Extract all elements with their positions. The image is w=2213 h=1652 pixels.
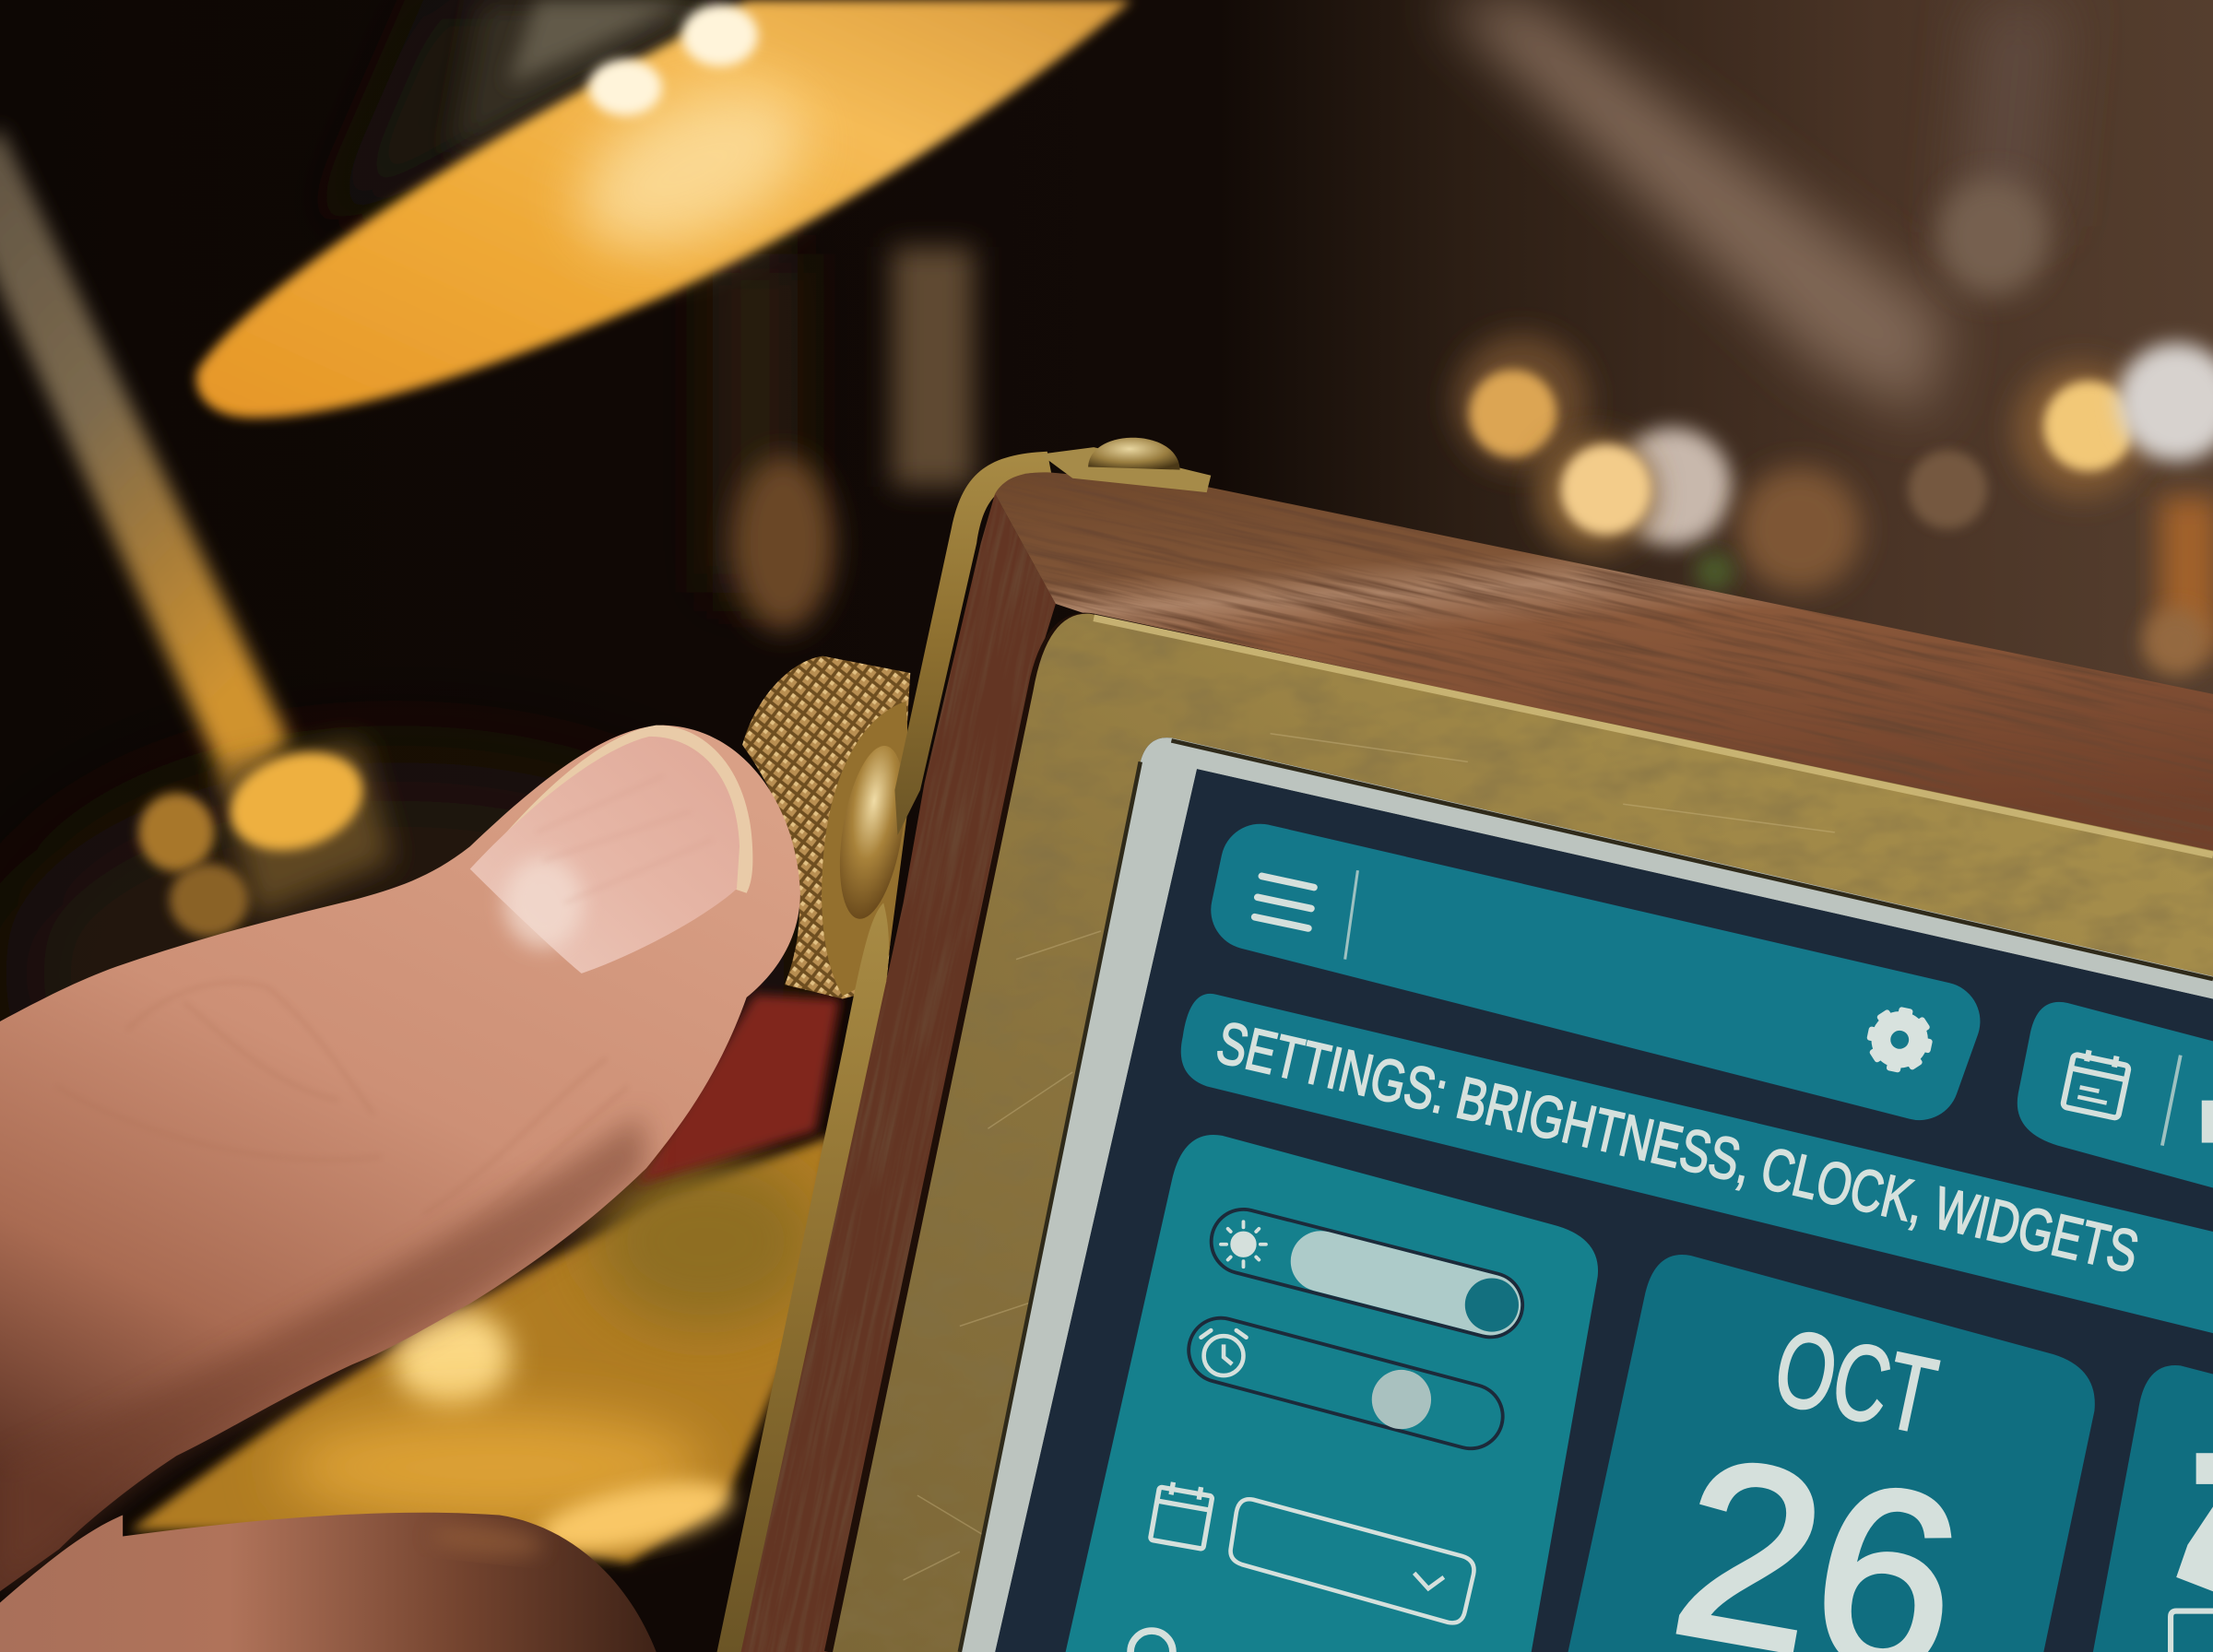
icon: hamburger menu: [1255, 876, 1314, 928]
left controls card: [1066, 1135, 1598, 1652]
icon: alarm clock: [1201, 1330, 1247, 1375]
dark shade underside: [325, 0, 748, 226]
date card: OCT: [1765, 1306, 1946, 1457]
icon: sun: [1221, 1221, 1266, 1267]
knuckle wrinkles: [56, 982, 628, 1242]
e-paper white margin: [960, 738, 2213, 1652]
date card: [1568, 1255, 2095, 1652]
e-paper dark screen: [995, 769, 2213, 1652]
lamp shade with glow: [196, 0, 1132, 418]
timer slider: [1201, 1330, 1471, 1429]
lower brass lamp base glow: [130, 1136, 833, 1564]
knurled brass knob: [742, 656, 916, 998]
fingernail: [470, 726, 752, 974]
walnut frame top face: [995, 472, 2213, 851]
brightness slider: [1221, 1221, 1519, 1332]
thin brass side bracket: [717, 452, 1051, 1652]
dark gap between wood and brass: [828, 617, 2213, 1652]
top menu bar: [1250, 864, 1941, 1080]
brass inner bezel: [819, 607, 2213, 1652]
right widgets card: [2093, 1365, 2213, 1652]
icon: settings gear: [1866, 1007, 1933, 1073]
icon: partial circle at bottom: [1130, 1631, 1173, 1652]
walnut frame left face: [741, 494, 1056, 1652]
thumb at bottom: [0, 1513, 657, 1652]
dropdown field: [1231, 1499, 1473, 1622]
background: blurred diagonal beams at right: [1439, 0, 2067, 416]
brass top plate and dome screw: [1040, 438, 1211, 492]
icon: calendar small: [2063, 1047, 2131, 1118]
icon: calendar: [1150, 1480, 1213, 1549]
bokeh lights: [1454, 335, 2213, 676]
calendar tab: [2018, 1002, 2213, 1188]
shadowed red skin behind finger tip: [635, 995, 840, 1185]
main finger: [0, 726, 800, 1591]
desk lamp stem and base: [0, 127, 393, 937]
